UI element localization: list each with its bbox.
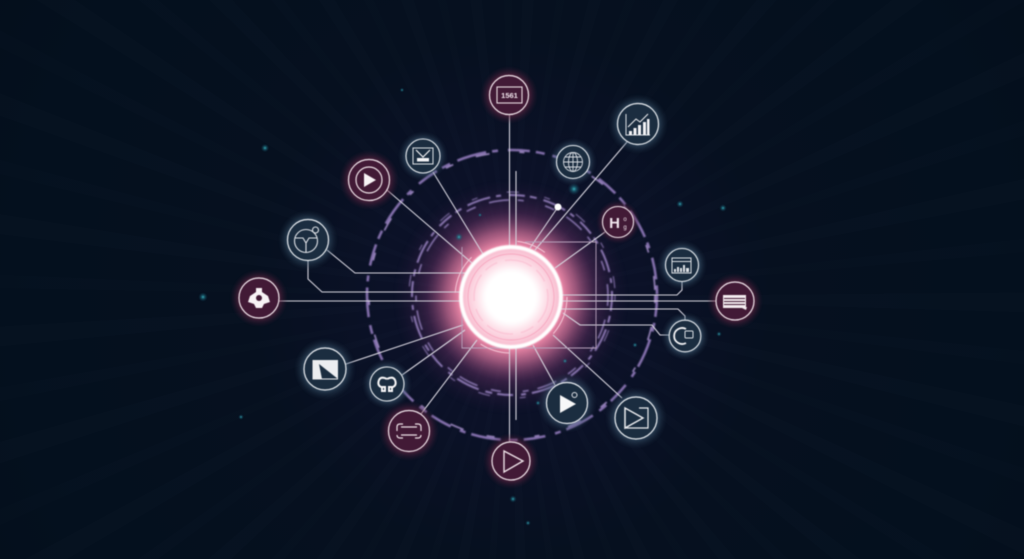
icon: steering wheel — [278, 210, 338, 270]
icon: calendar counter: 1561 — [501, 91, 518, 100]
particles — [198, 88, 726, 526]
icon: globe — [549, 138, 597, 186]
icon: framed play — [605, 387, 667, 449]
connector lines — [279, 115, 716, 442]
core ring — [455, 241, 567, 353]
icon: H2 molecule: H — [609, 215, 620, 232]
icon: H2 molecule: o — [623, 217, 627, 223]
icon: mail — [398, 131, 448, 181]
core glow — [393, 179, 629, 415]
icon: heart — [362, 359, 412, 409]
icon: dashboard window — [657, 240, 707, 290]
icon: message list — [707, 273, 763, 329]
icon: H2 molecule — [596, 200, 640, 244]
icon: growth chart — [608, 94, 668, 154]
outer dashed ring — [367, 150, 657, 440]
icon: gear — [230, 269, 288, 327]
icon: bottom play — [483, 433, 539, 489]
icon: play button — [339, 150, 399, 210]
icon: chat loop — [661, 312, 709, 360]
icon: calendar counter — [480, 66, 538, 124]
icon: H2 molecule: g — [623, 225, 627, 231]
inner dashed ring — [409, 192, 615, 398]
icon: envelope photo — [294, 338, 356, 400]
white spark — [554, 204, 562, 210]
icon: barbell — [379, 401, 439, 461]
icon: play with dot — [537, 373, 597, 433]
